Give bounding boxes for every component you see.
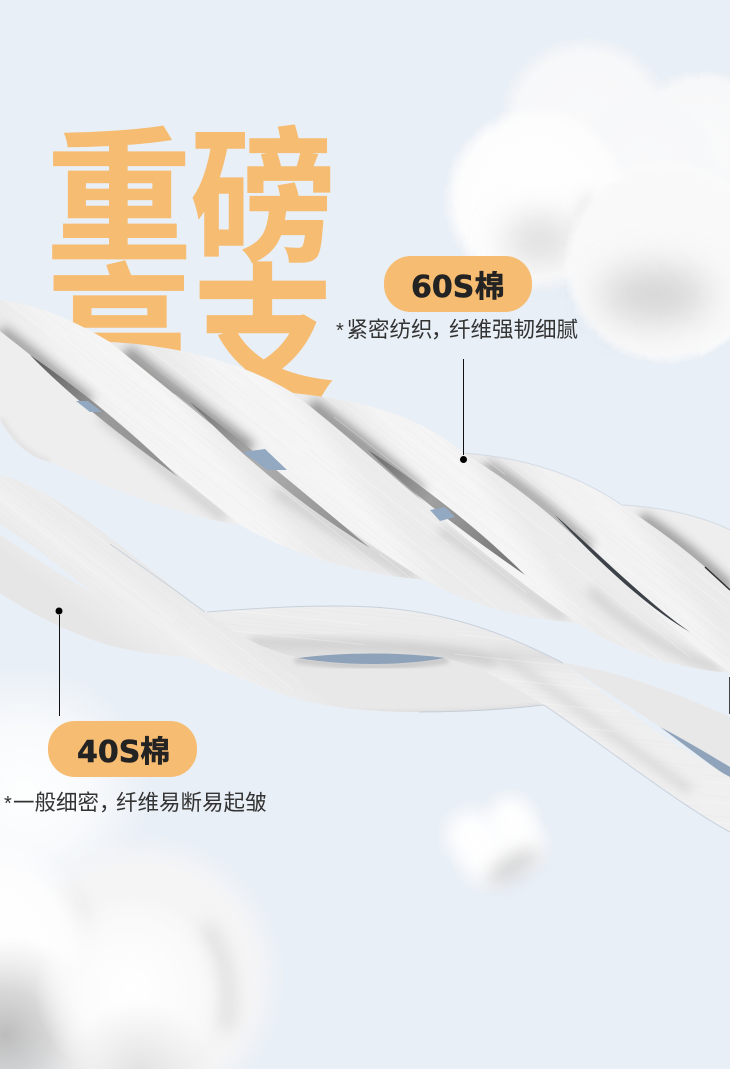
inner crease shade bbox=[62, 890, 86, 945]
rope: 40S cotton, loose twist bbox=[0, 470, 730, 835]
lower left strand bbox=[0, 535, 186, 657]
cloud: top right bbox=[443, 36, 730, 364]
gap 4 bbox=[555, 515, 690, 632]
pointer: 40S bbox=[56, 608, 62, 716]
caption: 60S: * bbox=[336, 320, 344, 342]
fibre texture bbox=[174, 394, 526, 593]
small cloud shade bbox=[482, 842, 544, 890]
upper left strand bbox=[0, 475, 544, 712]
badge: 60S棉: 棉 bbox=[474, 271, 504, 304]
cloud right ball bbox=[563, 160, 730, 364]
cloud middle puff bbox=[570, 90, 720, 240]
strand A bbox=[0, 300, 425, 580]
haze bbox=[0, 665, 150, 915]
gap 2 bbox=[190, 402, 370, 548]
over strand bbox=[205, 606, 730, 832]
dark line right bbox=[705, 567, 730, 590]
strand D bbox=[463, 453, 730, 673]
strand shading bbox=[0, 331, 730, 670]
fibre texture centre bbox=[296, 637, 524, 662]
centre puff bbox=[35, 895, 225, 1069]
shade on right ball bbox=[600, 267, 710, 323]
fibre texture left bbox=[0, 470, 300, 690]
back strand right bbox=[563, 663, 730, 780]
strand E bbox=[622, 505, 730, 590]
badge: 40S棉: 棉 bbox=[140, 736, 170, 769]
caption: 60S: ， bbox=[431, 318, 453, 342]
top edge highlight lines bbox=[463, 453, 730, 530]
shade on lower centre strand bbox=[294, 658, 449, 668]
cloud left ball bbox=[443, 106, 629, 292]
title: 重磅高支 bbox=[46, 118, 336, 417]
caption: 40S: 一般细密 bbox=[13, 791, 99, 815]
gap 1 bbox=[30, 355, 178, 477]
badge: 40S棉: 40S bbox=[77, 735, 140, 770]
slate edge lines bbox=[110, 544, 730, 832]
blue gap centre bbox=[298, 654, 445, 664]
blue patch 1 bbox=[76, 401, 102, 412]
cloud top puff bbox=[498, 36, 674, 212]
shade on left ball bbox=[504, 216, 576, 264]
strand C bbox=[293, 393, 730, 673]
badge: 40S棉 bbox=[48, 721, 197, 777]
contact shadow bbox=[582, 195, 602, 275]
edge pointer right bbox=[728, 677, 730, 714]
badge: 60S棉: 60S bbox=[411, 270, 474, 305]
caption: 60S: 紧密纺织 bbox=[346, 318, 433, 342]
cloud: small centre bbox=[436, 787, 554, 896]
blue gap right bbox=[660, 727, 730, 778]
cloud right puff bbox=[620, 70, 730, 230]
right crease shade bbox=[205, 925, 228, 1030]
caption: 60S: 纤维强韧细腻 bbox=[449, 318, 578, 342]
blue patch 2 bbox=[243, 449, 287, 470]
blue patch 3 bbox=[430, 507, 455, 521]
strand Z bbox=[0, 331, 240, 525]
caption: 40S: * bbox=[4, 793, 12, 815]
badge: 60S棉 bbox=[384, 256, 532, 312]
lower shade bbox=[65, 1000, 215, 1069]
pointer: 60S bbox=[460, 359, 467, 463]
caption: 40S: 纤维易断易起皱 bbox=[116, 791, 267, 815]
dark lower left bbox=[0, 935, 105, 1069]
shading on over strand bbox=[250, 642, 690, 790]
cloud underlay at right edge bbox=[700, 70, 730, 364]
title: 重磅高支: 重磅 bbox=[46, 118, 336, 281]
main puff bbox=[0, 833, 285, 1069]
gap 3 bbox=[368, 450, 525, 575]
cloud: bottom left bbox=[0, 665, 285, 1069]
title: 重磅高支: 高支 bbox=[46, 254, 336, 417]
rope: 60S cotton, tight twist bbox=[0, 295, 730, 680]
strand B bbox=[110, 342, 578, 623]
caption: 40S: ， bbox=[99, 791, 121, 815]
left puff bbox=[0, 835, 95, 1055]
